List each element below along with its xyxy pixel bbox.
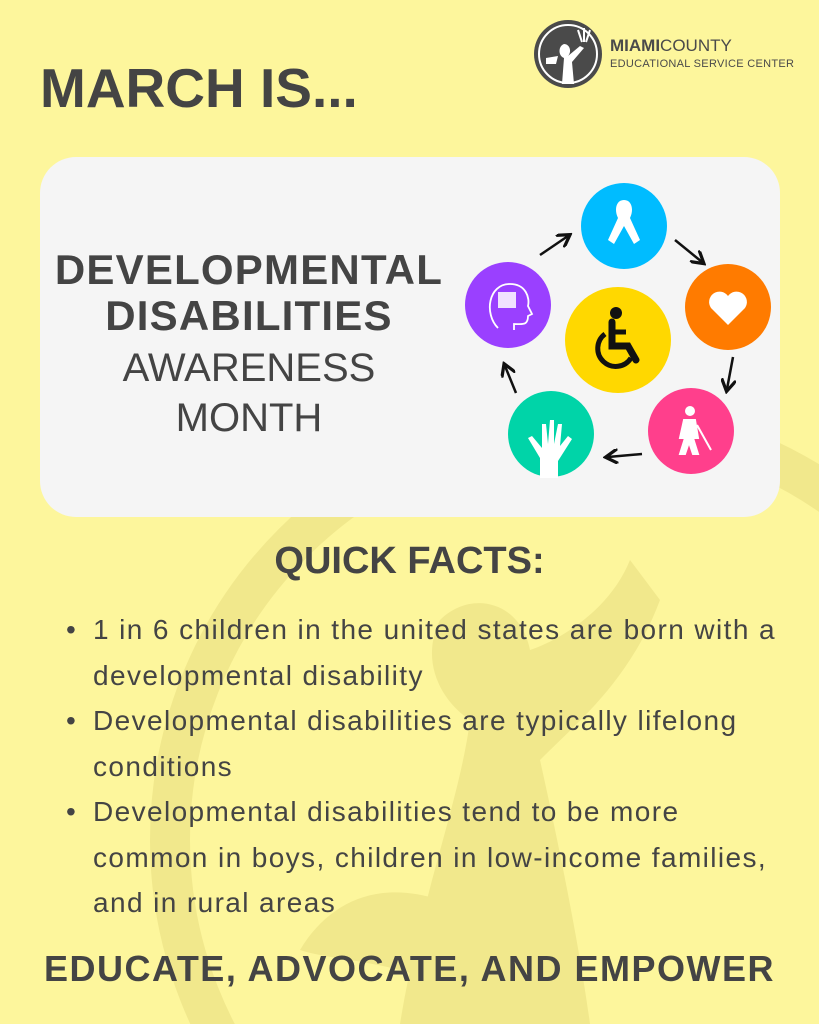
icon: wheelchair <box>565 287 671 393</box>
fact list: Developmental disabilities tend to be more common in boys, children in low-income families, and in rural areas <box>93 796 767 918</box>
icon: ribbon <box>581 183 667 269</box>
heading: developmental disabilities: DISABILITIES <box>105 292 393 339</box>
icon cycle <box>465 183 771 478</box>
title: March is: MARCH IS... <box>40 57 358 119</box>
fact list <box>66 614 776 918</box>
heading: developmental disabilities <box>55 246 443 440</box>
heading: developmental disabilities: MONTH <box>176 396 322 440</box>
fact list: • <box>66 705 77 736</box>
icon: head puzzle <box>465 262 551 348</box>
heading: quick facts: QUICK FACTS: <box>274 540 545 582</box>
fact list: Developmental disabilities are typically lifelong conditions <box>93 705 737 782</box>
icon: blind person <box>648 388 734 474</box>
icon: hands <box>508 391 594 478</box>
logo: EDUCATIONAL SERVICE CENTER <box>610 58 794 70</box>
heading: developmental disabilities: DEVELOPMENTAL <box>55 246 443 293</box>
heading: developmental disabilities: AWARENESS <box>123 346 375 390</box>
fact list: • <box>66 614 77 645</box>
logo <box>534 20 794 88</box>
logo: MIAMICOUNTY <box>610 36 732 55</box>
icon: heart <box>685 264 771 350</box>
fact list: • <box>66 796 77 827</box>
footer slogan: EDUCATE, ADVOCATE, AND EMPOWER <box>44 948 775 989</box>
fact list: 1 in 6 children in the united states are born with a developmental disability <box>93 614 776 690</box>
panel: title card <box>40 157 780 517</box>
